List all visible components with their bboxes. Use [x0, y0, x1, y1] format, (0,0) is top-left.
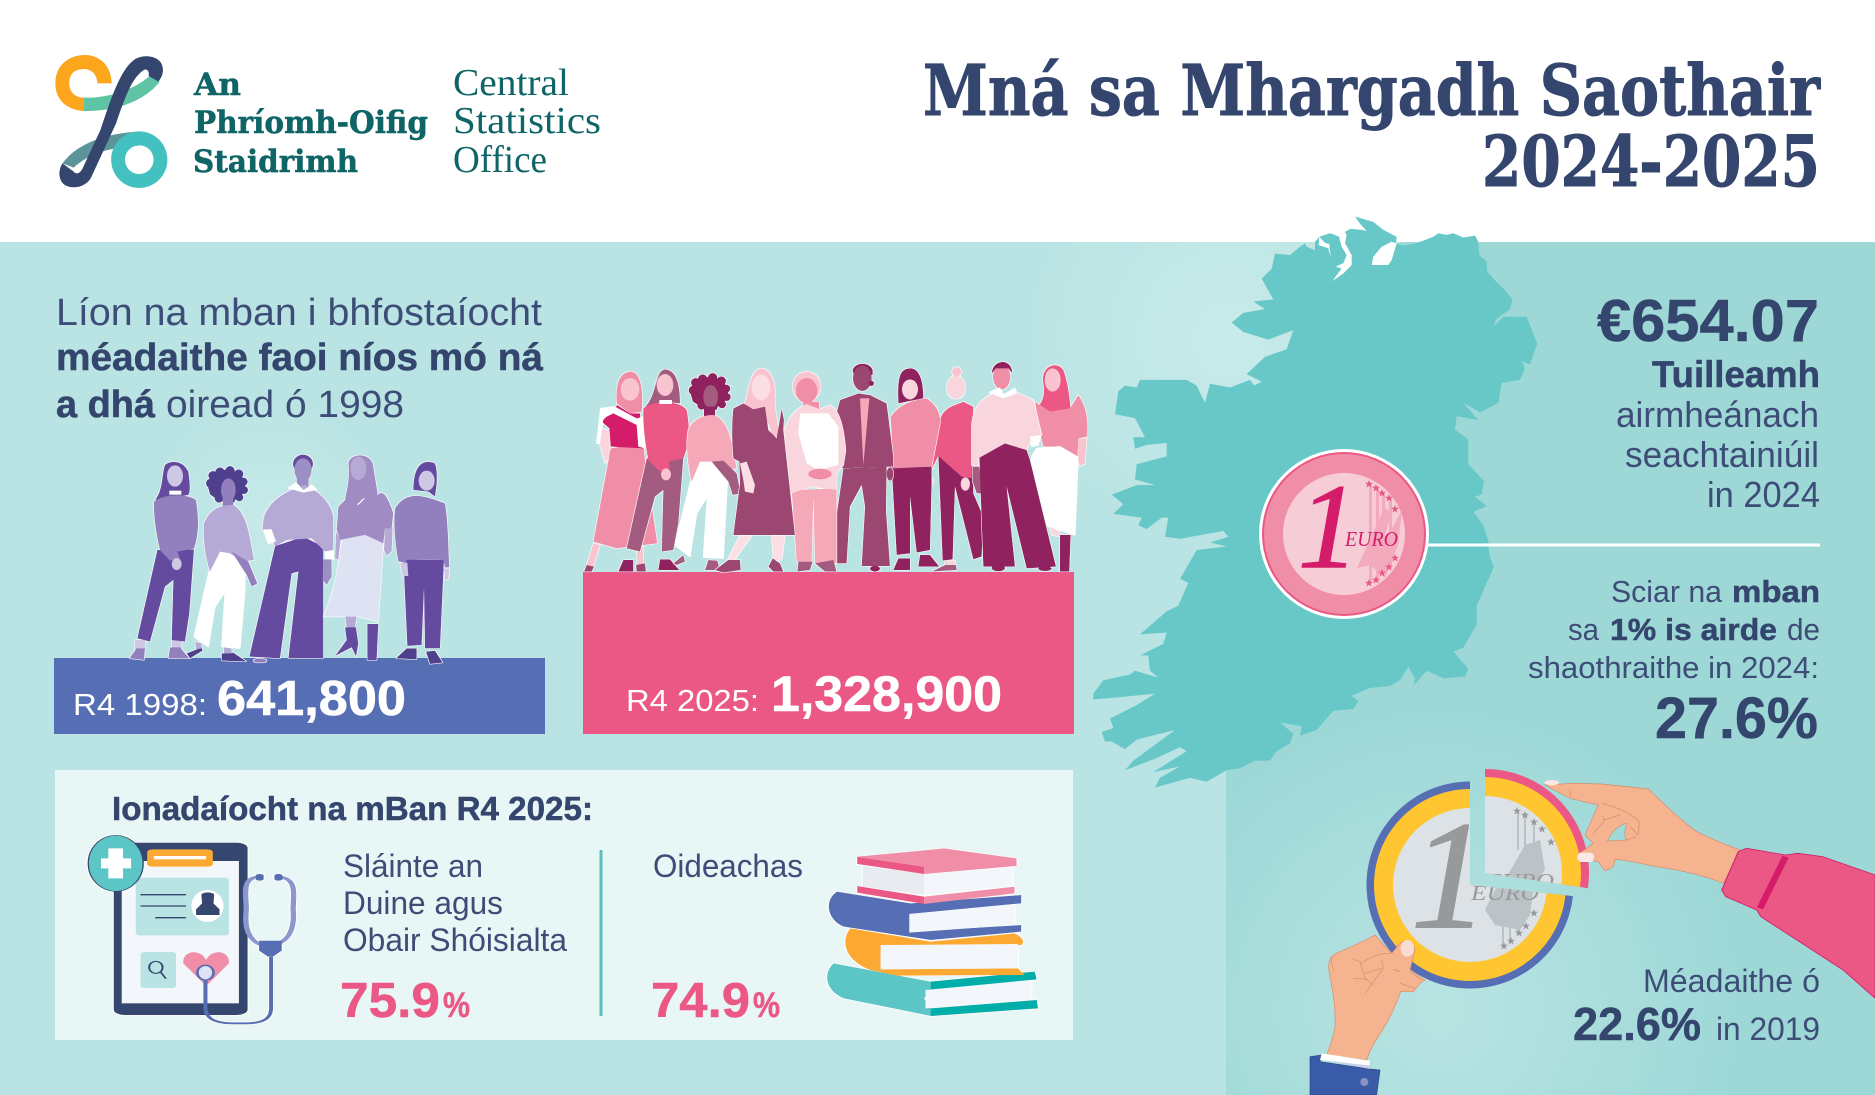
headline text: a dhá [56, 384, 156, 426]
stat: average weekly earnings: airmheánach [1616, 394, 1819, 435]
headline text [56, 292, 544, 426]
text: health [340, 848, 567, 1028]
bar: 1998: 641,800 [217, 672, 406, 726]
stat: increase since 2019 [1573, 963, 1820, 1050]
text: education: 74.9 [651, 974, 750, 1028]
panel heading: Ionadaíocht na mBan R4 2025: [112, 790, 593, 827]
headline text: méadaithe faoi níos mó ná [56, 337, 544, 379]
logo text: English: Office [453, 139, 547, 181]
right hand and sleeve [1544, 780, 1875, 998]
logo text: Irish: Phríomh-Oifig [194, 105, 428, 141]
stat: share of top 1%: mban [1732, 574, 1820, 609]
bar: 2025 [583, 572, 1074, 734]
icon: books [827, 848, 1038, 1016]
text: health: Obair Shóisialta [343, 922, 567, 958]
coin body: 1 [1411, 791, 1488, 961]
bar: 2025: 1,328,900 [771, 666, 1002, 722]
text: education: % [753, 986, 780, 1025]
logo text: Irish [193, 67, 428, 180]
logo text: English [453, 62, 601, 181]
stat: share of top 1%: 1% is airde [1610, 612, 1777, 647]
background: dark teal panel [1226, 242, 1875, 1095]
people: 1998 group [129, 455, 449, 664]
stat: average weekly earnings [1597, 288, 1820, 515]
bar: 1998 [54, 658, 545, 734]
logo text: Irish: Staidrimh [193, 144, 358, 180]
logo text: English: Statistics [453, 100, 601, 142]
logo mark [55, 55, 167, 188]
stat: average weekly earnings: seachtainiúil [1625, 434, 1819, 475]
stat: average weekly earnings: in 2024 [1707, 474, 1820, 515]
background glow: people [100, 350, 440, 690]
text: health: Sláinte an [343, 848, 483, 884]
logo: CSO [55, 55, 601, 188]
logo text: Irish: An [193, 67, 241, 103]
left hand and sleeve [1310, 935, 1425, 1095]
people: 2025 group [584, 362, 1088, 573]
stat: share of top 1% [1528, 574, 1820, 751]
stat: share of top 1%: shaothraithe in 2024: [1528, 650, 1819, 685]
text: health: Duine agus [343, 885, 503, 921]
text: education [651, 848, 803, 1028]
logo text: English: Central [453, 62, 569, 104]
icon: clipboard and stethoscope [88, 835, 294, 1023]
title [923, 49, 1821, 203]
bar: 2025: R4 2025: [626, 683, 759, 718]
stat: share of top 1%: Sciar na [1611, 574, 1723, 609]
bar: 1998: R4 1998: [73, 687, 207, 722]
headline text: oiread ó 1998 [166, 384, 404, 426]
text: education: Oideachas [653, 848, 803, 884]
coin slice: EURO [1485, 869, 1554, 893]
illustration: coin with slice and hands [1310, 769, 1875, 1095]
map of Ireland [1093, 216, 1537, 787]
coin body: EURO [1470, 881, 1539, 905]
background: light teal panel [0, 242, 1875, 1095]
stat: share of top 1%: 27.6% [1655, 686, 1818, 751]
euro medallion: 1 [1298, 460, 1358, 594]
stat: average weekly earnings: €654.07 [1597, 288, 1819, 354]
stat: increase since 2019: in 2019 [1716, 1011, 1820, 1047]
stat: increase since 2019: 22.6% [1573, 998, 1701, 1050]
coin body [1366, 782, 1574, 988]
divider [600, 850, 602, 1016]
connector line [1428, 544, 1820, 546]
stat: average weekly earnings: Tuilleamh [1652, 354, 1820, 395]
stat: share of top 1%: de [1787, 612, 1820, 647]
text: health: 75.9 [340, 974, 440, 1028]
stat: increase since 2019: Méadaithe ó [1643, 963, 1820, 999]
stat: share of top 1%: sa [1568, 612, 1600, 647]
text: health: % [443, 986, 470, 1025]
background glow: left [1000, 242, 1500, 642]
euro medallion: EURO [1344, 527, 1398, 551]
headline text: Líon na mban i bhfostaíocht [56, 292, 542, 334]
coin slice [1485, 769, 1589, 888]
panel: women's representation [55, 770, 1073, 1040]
euro medallion [1259, 449, 1429, 619]
